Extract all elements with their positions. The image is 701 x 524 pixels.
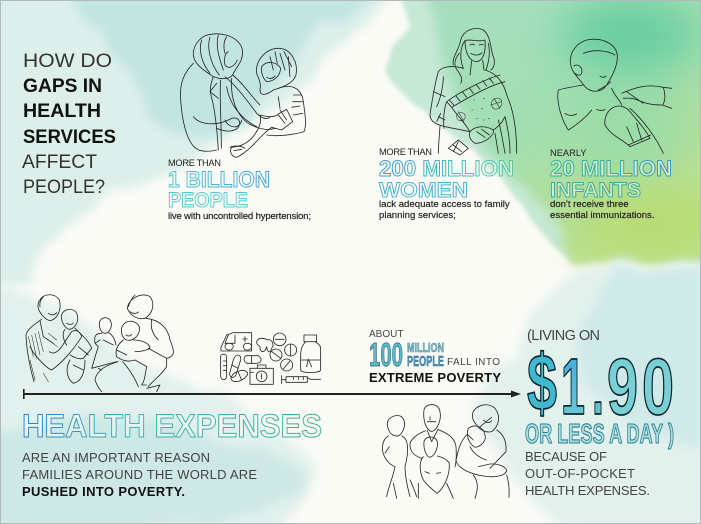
stat: 20 million infants (550, 148, 672, 221)
timeline arrow (23, 389, 521, 399)
figure: 100: 100 (369, 336, 403, 373)
text: important reason (22, 450, 257, 499)
heading: how do gaps in health services affect people (22, 51, 116, 198)
description: lack adequate access to family (379, 199, 510, 210)
heading: health expenses: HEALTH EXPENSES (22, 408, 322, 444)
figure: $1.90: 1 (561, 342, 585, 431)
heading: how do gaps in health services affect people: GAPS IN (23, 76, 102, 97)
illustration: family with elderly couple (382, 405, 509, 498)
figure: people: PEOPLE (168, 189, 248, 212)
watercolor wash: top right green (383, 0, 701, 262)
heading: how do gaps in health services affect people: HOW DO (23, 51, 112, 72)
icons: medical supplies (221, 333, 321, 384)
text: important reason: FAMILIES AROUND THE WORLD ARE (22, 467, 257, 482)
icon: capsules (230, 355, 261, 382)
figure: 1 billion: 1 BILLION (168, 167, 270, 192)
figure: $1.90: 9 (607, 342, 638, 431)
watercolor wash: bottom left teal (0, 280, 312, 524)
label: about: ABOUT (369, 329, 403, 340)
figure: million: MILLION (407, 340, 444, 355)
figure: $1.90 (527, 338, 674, 431)
figure: $1.90: 0 (642, 342, 674, 431)
figure: 200 million: 200 MILLION (379, 156, 514, 181)
heading: how do gaps in health services affect people: SERVICES (23, 127, 116, 148)
label: more than: MORE THAN (168, 158, 221, 168)
text: important reason: ARE AN IMPORTANT REASON (22, 450, 210, 465)
icon: ambulance (221, 333, 252, 351)
icon: first aid kit (250, 365, 273, 384)
watercolor wash: top left teal (0, 0, 390, 290)
text: extreme poverty: EXTREME POVERTY (369, 370, 501, 385)
figure: people: PEOPLE (407, 353, 444, 370)
stat: 100 million people (369, 329, 501, 385)
figure: $1.90: . (592, 342, 604, 431)
text: fall into: FALL INTO (447, 357, 500, 368)
text: out-of-pocket health expenses: OUT-OF-POCKET (525, 466, 635, 481)
heading: how do gaps in health services affect people: AFFECT (22, 152, 97, 173)
text: important reason: PUSHED INTO POVERTY. (22, 484, 185, 499)
text: out-of-pocket health expenses: HEALTH EXPENSES. (525, 483, 650, 498)
watercolor wash: bottom right blue (473, 266, 701, 524)
icon: thermometer (221, 354, 227, 380)
stat: one billion people (168, 158, 311, 222)
icon: medicine bottle (301, 335, 321, 372)
icon: syringe (282, 376, 321, 384)
figure: $1.90: $ (527, 338, 557, 427)
label: more than: MORE THAN (379, 147, 432, 157)
illustration: woman in sari (430, 28, 517, 155)
text: living on: (LIVING ON (527, 328, 600, 344)
description: live with uncontrolled hypertension; (168, 211, 311, 222)
illustration: family with children (26, 295, 173, 392)
figure: infants: INFANTS (550, 179, 641, 202)
figure: 20 million: 20 MILLION (550, 156, 672, 181)
label: nearly: NEARLY (550, 148, 587, 158)
figure: women: WOMEN (379, 179, 468, 202)
illustration: doctor taking patient's blood pressure (180, 34, 305, 157)
description: planning services; (379, 210, 456, 221)
text: out-of-pocket health expenses (525, 449, 650, 498)
text: out-of-pocket health expenses: BECAUSE OF (525, 449, 607, 464)
heading: how do gaps in health services affect people: HEALTH (23, 101, 101, 122)
description: don't receive three (550, 199, 629, 210)
description: essential immunizations. (550, 210, 655, 221)
icon: tooth (257, 338, 273, 352)
illustration: infant being vaccinated (558, 39, 672, 153)
stat: 200 million women (379, 147, 514, 221)
icon: pills (270, 333, 297, 371)
heading: how do gaps in health services affect people: PEOPLE? (23, 177, 105, 198)
